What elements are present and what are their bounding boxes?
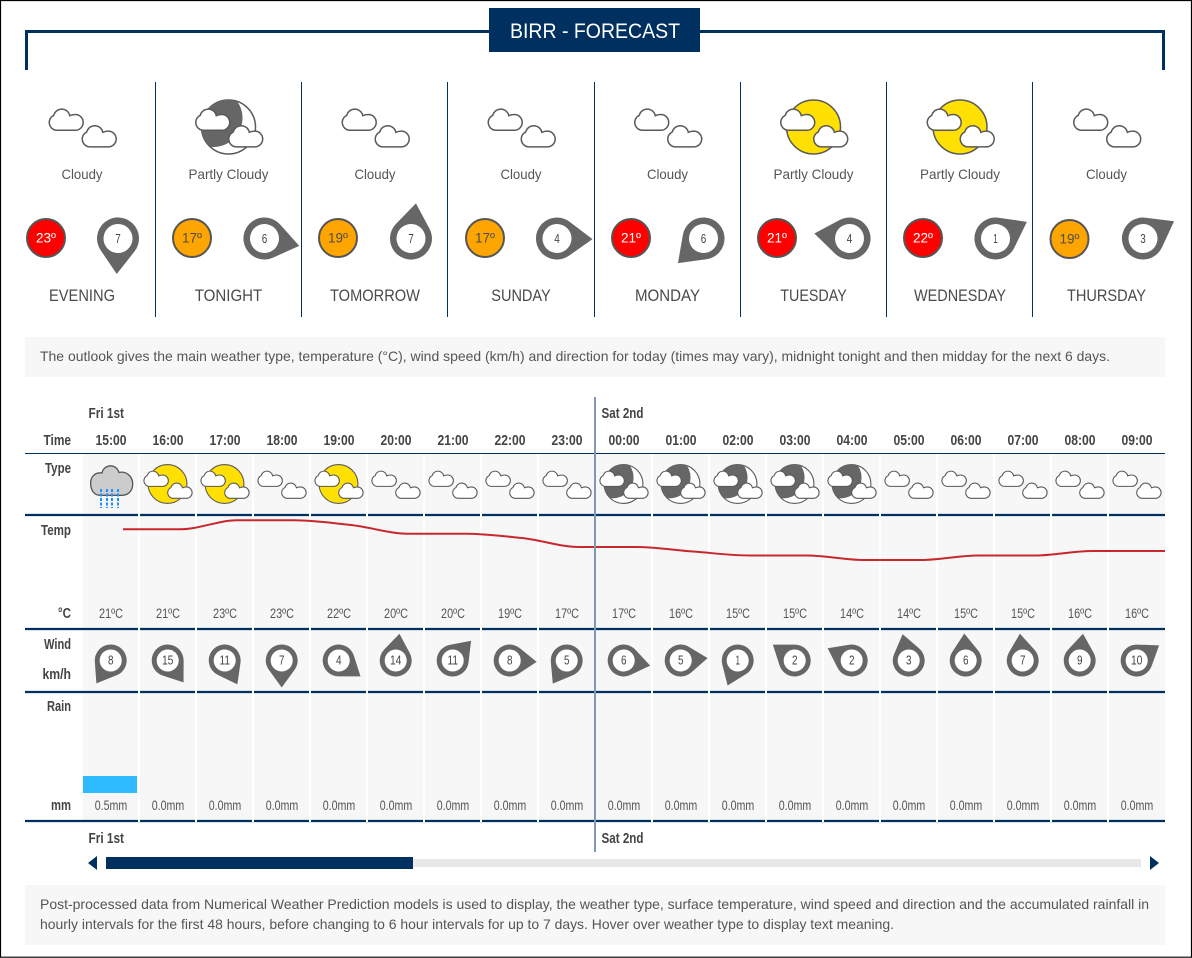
panel: outlook evening: 7: [115, 231, 121, 246]
scrollbar: [88, 856, 1159, 870]
temperature values: 20ºC: [384, 606, 408, 621]
rain values: [95, 798, 1153, 813]
temperature values: 15ºC: [1011, 606, 1035, 621]
row labels: Rain: [47, 699, 71, 715]
time axis: 18:00: [266, 433, 298, 449]
time axis: [96, 433, 1152, 449]
panel: outlook monday: 6: [701, 231, 706, 246]
time axis: 22:00: [494, 433, 526, 449]
temperature values: 16ºC: [1068, 606, 1092, 621]
outlook column dividers: [156, 82, 1032, 317]
wind direction pins row: 6: [963, 652, 968, 668]
panel: outlook tuesday: 4: [847, 231, 852, 246]
hourly table background: [83, 454, 1165, 820]
time axis: 19:00: [324, 433, 354, 449]
date labels bottom: Fri 1st: [88, 831, 124, 847]
time axis: 15:00: [96, 433, 126, 449]
rain values: 0.0mm: [209, 798, 241, 813]
panel: outlook tuesday: Partly Cloudy: [774, 166, 854, 182]
temperature values: 15ºC: [726, 606, 750, 621]
temperature values: 21ºC: [99, 606, 123, 621]
panel: outlook tomorrow: [319, 109, 437, 305]
temperature values: 15ºC: [783, 606, 807, 621]
rain values: 0.0mm: [608, 798, 640, 813]
wind direction pins row: 6: [621, 652, 626, 668]
wind direction pins row: 2: [849, 652, 854, 668]
temperature values: 20ºC: [441, 606, 465, 621]
panel: outlook monday: 21º: [621, 230, 641, 246]
time axis: 20:00: [380, 433, 412, 449]
wind direction pins row: 10: [1131, 652, 1142, 668]
panel: outlook tonight: 6: [262, 231, 267, 246]
text block: outlook note: [25, 337, 1165, 377]
panel: outlook sunday: 4: [554, 231, 560, 246]
title: [489, 8, 700, 52]
rain values: 0.0mm: [893, 798, 925, 813]
wind direction pins row: 11: [219, 652, 230, 668]
row labels: mm: [51, 798, 71, 814]
wind direction pins row: 5: [564, 652, 569, 668]
panel: outlook evening: 23º: [36, 230, 56, 246]
time axis: 02:00: [722, 433, 754, 449]
row labels: Wind: [44, 637, 71, 653]
date labels top: [88, 406, 644, 422]
wind direction pins row: 3: [906, 652, 911, 668]
text block: data note: [25, 885, 1165, 945]
panel: outlook sunday: SUNDAY: [491, 287, 551, 305]
time axis: 08:00: [1064, 433, 1096, 449]
panel: outlook monday: [612, 109, 733, 305]
panel: outlook tuesday: TUESDAY: [780, 287, 847, 305]
rain values: 0.0mm: [380, 798, 412, 813]
rain values: 0.0mm: [152, 798, 184, 813]
temperature line chart: [123, 520, 1165, 560]
panel: outlook wednesday: Partly Cloudy: [920, 166, 1000, 182]
rain values: 0.0mm: [1007, 798, 1039, 813]
time axis: 04:00: [836, 433, 868, 449]
panel: outlook thursday: [1050, 109, 1184, 305]
rain values: 0.0mm: [1064, 798, 1096, 813]
panel: outlook tomorrow: TOMORROW: [330, 287, 420, 305]
row labels: Time: [44, 433, 71, 449]
time axis: 03:00: [780, 433, 810, 449]
date labels bottom: [88, 831, 644, 847]
row labels: [41, 433, 71, 814]
panel: outlook tomorrow: Cloudy: [354, 166, 396, 182]
row labels: Type: [45, 461, 71, 477]
rain values: 0.0mm: [836, 798, 868, 813]
panel: outlook tuesday: [758, 100, 873, 305]
time axis: 21:00: [438, 433, 468, 449]
weather type icons row: [91, 457, 1161, 508]
panel: outlook tonight: 17º: [182, 230, 202, 246]
panel: outlook sunday: 17º: [475, 230, 495, 246]
rain values: 0.0mm: [665, 798, 697, 813]
day boundary line: [594, 397, 596, 852]
rain values: 0.0mm: [779, 798, 811, 813]
time axis: 06:00: [950, 433, 982, 449]
panel: outlook wednesday: 22º: [913, 230, 933, 246]
date labels top: Fri 1st: [88, 406, 124, 422]
row labels: °C: [58, 606, 71, 622]
wind direction pins row: 8: [108, 652, 113, 668]
wind direction pins row: 4: [336, 652, 341, 668]
temperature values: 17ºC: [612, 606, 636, 621]
arrow: scroll right: [1150, 856, 1159, 870]
panel: outlook wednesday: [904, 100, 1037, 305]
temperature values: 14ºC: [840, 606, 864, 621]
time axis: 05:00: [894, 433, 924, 449]
text block: outlook note: The outlook gives the main weather type, temperature (°C), wind speed (km/h) and direction for today (times may vary), midnight tonight and then midday for the next 6 days.: [40, 348, 1110, 364]
wind direction pins row: 7: [279, 652, 284, 668]
row labels: Temp: [41, 523, 71, 539]
panel: outlook monday: Cloudy: [647, 166, 688, 182]
temperature values: 16ºC: [1125, 606, 1149, 621]
date labels bottom: Sat 2nd: [602, 831, 644, 847]
panel: outlook evening: EVENING: [49, 287, 115, 305]
wind direction pins row: 15: [162, 652, 173, 668]
temperature values: [99, 606, 1149, 621]
rain values: 0.5mm: [95, 798, 127, 813]
time axis: 09:00: [1122, 433, 1152, 449]
wind direction pins row: 9: [1077, 652, 1082, 668]
rain values: 0.0mm: [266, 798, 298, 813]
wind direction pins row: 2: [792, 652, 797, 668]
rain values: 0.0mm: [494, 798, 526, 813]
panel: outlook thursday: 19º: [1060, 230, 1080, 246]
panel: outlook wednesday: 1: [993, 231, 998, 246]
panel: outlook thursday: Cloudy: [1086, 166, 1127, 182]
rain values: 0.0mm: [950, 798, 982, 813]
wind direction pins row: 1: [735, 652, 740, 668]
icon: rain cloud: [91, 466, 133, 508]
panel: outlook evening: [27, 109, 140, 305]
temperature values: 19ºC: [498, 606, 522, 621]
wind direction pins row: 8: [507, 652, 512, 668]
time axis: 17:00: [210, 433, 240, 449]
wind direction pins row: 5: [678, 652, 683, 668]
text block: data note: hourly intervals for the first 48 hours, before changing to 6 hour intervals for up to 7 days. Hover over weather type to display text meaning.: [40, 916, 894, 932]
panel: outlook thursday: 3: [1140, 231, 1146, 246]
time axis: 00:00: [608, 433, 640, 449]
panel: outlook monday: MONDAY: [635, 287, 700, 305]
panel: outlook tomorrow: 7: [408, 231, 414, 246]
temperature values: 23ºC: [213, 606, 237, 621]
time axis: 16:00: [152, 433, 184, 449]
wind direction pins row: 7: [1020, 652, 1025, 668]
title bracket: [26, 32, 1164, 70]
text block: data note: Post-processed data from Numerical Weather Prediction models is used to display, the weather type, surface temperature, wind speed and direction and the accumulated rainfall in: [40, 896, 1149, 912]
time axis: 01:00: [666, 433, 696, 449]
panel: outlook wednesday: WEDNESDAY: [914, 287, 1006, 305]
panel: outlook sunday: [466, 109, 593, 305]
panel: outlook sunday: Cloudy: [500, 166, 542, 182]
temperature values: 17ºC: [555, 606, 579, 621]
panel: outlook tonight: TONIGHT: [195, 287, 262, 305]
rain values: 0.0mm: [722, 798, 754, 813]
panel: outlook tuesday: 21º: [767, 230, 787, 246]
arrow: scroll left: [88, 856, 97, 870]
temperature values: 16ºC: [669, 606, 693, 621]
temperature values: 21ºC: [156, 606, 180, 621]
panel: outlook thursday: THURSDAY: [1067, 287, 1146, 305]
temperature values: 15ºC: [954, 606, 978, 621]
temperature values: 23ºC: [270, 606, 294, 621]
rain values: 0.0mm: [323, 798, 355, 813]
title: BIRR - FORECAST: [510, 19, 680, 43]
panel: outlook tomorrow: 19º: [328, 230, 348, 246]
time axis: 23:00: [552, 433, 582, 449]
temperature values: 22ºC: [327, 606, 351, 621]
panel: outlook tonight: [173, 89, 304, 305]
rain values: 0.0mm: [551, 798, 583, 813]
wind direction pins row: 14: [390, 652, 401, 668]
wind direction pins row: 11: [447, 652, 458, 668]
panel: outlook tonight: Partly Cloudy: [188, 166, 268, 182]
panel: outlook evening: Cloudy: [62, 166, 102, 182]
time axis: 07:00: [1008, 433, 1038, 449]
rain values: 0.0mm: [1121, 798, 1153, 813]
date labels top: Sat 2nd: [602, 406, 644, 422]
row labels: km/h: [42, 667, 71, 683]
temperature values: 14ºC: [897, 606, 921, 621]
rain values: 0.0mm: [437, 798, 469, 813]
rain bar: [83, 776, 137, 793]
wind direction pins row: [83, 630, 1168, 692]
